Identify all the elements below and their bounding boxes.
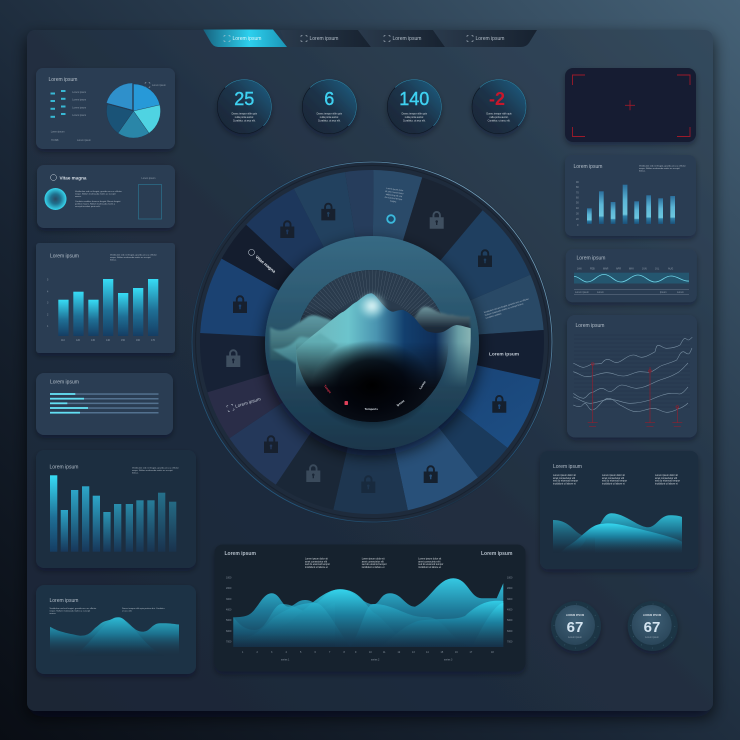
description: finibus. — [110, 260, 117, 262]
title: Lorem ipsum — [50, 380, 79, 386]
title: Lorem ipsum — [50, 598, 78, 604]
axis: 70 — [576, 192, 579, 194]
mountains — [270, 292, 471, 430]
footer labels — [51, 130, 91, 142]
radial wheel — [191, 161, 553, 523]
title left: Lorem ipsum — [224, 551, 256, 557]
axes: 1 — [242, 651, 244, 654]
axis — [47, 278, 156, 342]
axes: 1000 — [507, 576, 513, 580]
text blocks: Lorem ipsum dolor sit — [305, 558, 328, 560]
gauge right — [628, 601, 678, 651]
axes: 2000 — [226, 587, 232, 590]
text blocks: sed do eiusmod tempor — [553, 480, 578, 483]
footer labels: Lorem ipsum — [77, 139, 91, 142]
text blocks: Lorem ipsum dolor sit — [655, 474, 678, 477]
text blocks: incididunt ut labore et — [362, 566, 385, 569]
caption: nulla porta auctor. — [235, 116, 254, 119]
month labels: JAN — [577, 268, 582, 270]
description: finibus. — [639, 170, 646, 172]
stat: 25 — [217, 80, 271, 134]
dial bowl — [296, 270, 448, 422]
segment label: lorem ipsum left: Lorem ipsum — [234, 396, 262, 409]
descriptions: ut arcu elit. — [122, 610, 133, 612]
month labels: FEB — [590, 268, 595, 270]
wave — [574, 274, 689, 282]
axis: 170 — [151, 339, 156, 342]
footer: Lorem ipsum — [575, 291, 589, 294]
value: 25 — [234, 89, 254, 109]
progress — [50, 393, 88, 414]
axis: 30 — [576, 212, 579, 216]
description — [110, 254, 157, 262]
main massif — [296, 293, 471, 390]
description: Vestibulum sed est feugiat, gravida arcu ac efficitur — [132, 466, 179, 470]
text blocks: Lorem ipsum dolor sit — [418, 558, 441, 560]
areas — [233, 578, 503, 647]
text blocks: sed do eiusmod tempor — [602, 480, 627, 483]
axes: series 1 — [281, 658, 290, 662]
active tab: Lorem ipsum — [232, 36, 261, 42]
panel: wave — [566, 249, 697, 302]
description — [639, 164, 686, 172]
text blocks — [553, 474, 680, 485]
axis: 80 — [576, 186, 579, 189]
text block: Curabitur sodales rhoncus feugiat. Mauris feugiat — [75, 200, 121, 203]
caption: Curabitur, ut arcu elit. — [403, 120, 426, 122]
axes: 2 — [256, 651, 258, 654]
text blocks: Lorem ipsum dolor sit — [553, 474, 576, 477]
caption: Donec tempor nibh quis — [232, 112, 258, 116]
caption: Curabitur, ut arcu elit. — [233, 120, 256, 122]
axis: 110 — [61, 339, 65, 342]
description: neque. Nullam malesuada mattis ac suscipit — [639, 167, 680, 170]
areas — [553, 513, 682, 553]
text block: finibus. — [75, 196, 82, 198]
central hub — [265, 236, 479, 450]
footer labels: Lorem ipsum — [51, 130, 65, 133]
gauge left: LOREM IPSUM — [566, 613, 584, 617]
text blocks: Lorem ipsum dolor sit — [362, 558, 385, 560]
axes: 3000 — [507, 598, 513, 601]
axes: 6000 — [507, 630, 513, 633]
title: Lorem ipsum — [50, 464, 78, 470]
title: Lorem ipsum — [576, 323, 604, 329]
axes: 2000 — [507, 587, 513, 590]
caption — [486, 112, 512, 122]
caption — [232, 112, 258, 122]
value: -2 — [489, 89, 505, 109]
axes: 4 — [286, 651, 288, 654]
tabs — [203, 30, 537, 47]
axes: 9 — [355, 651, 357, 654]
pie label: Lorem ipsum — [152, 84, 166, 87]
description: finibus. — [132, 472, 139, 474]
descriptions: finibus. — [50, 613, 57, 615]
caption: nulla porta auctor. — [489, 116, 509, 119]
back ridge left — [270, 315, 335, 360]
dial labels: Tempo — [323, 384, 332, 394]
axis: 50 — [576, 202, 579, 204]
axis: 0 — [577, 224, 579, 227]
description: Vestibulum sed est feugiat, gravida arcu ac efficitur — [639, 164, 686, 168]
gauge right: Lorem ipsum — [645, 636, 659, 639]
axes: 3000 — [226, 598, 232, 601]
axis — [576, 181, 579, 227]
text blocks: sed do eiusmod tempor — [418, 563, 443, 566]
axes: 10 — [369, 651, 372, 654]
axes — [226, 576, 513, 662]
segment text: right — [484, 297, 531, 320]
gauge ticks — [631, 604, 675, 648]
text blocks: amet consectetur elit — [362, 560, 384, 563]
grid — [574, 335, 690, 407]
axis: 150 — [121, 339, 126, 342]
axes: 5000 — [507, 619, 513, 622]
gauge left: Lorem ipsum — [568, 636, 582, 639]
panel: line chart — [567, 315, 697, 438]
panel: vitae magna — [37, 165, 175, 228]
outer rings — [191, 161, 553, 523]
caption: nulla porta auctor. — [320, 116, 339, 119]
axis: 2 — [47, 314, 49, 316]
gauge ticks — [554, 604, 598, 648]
caption: Curabitur, ut arcu elit. — [488, 120, 511, 122]
caption: Donec tempor nibh quis — [486, 112, 512, 116]
axes: 12 — [398, 651, 401, 654]
dial labels: Lorem — [418, 380, 427, 390]
title: Lorem ipsum — [50, 254, 79, 260]
bars — [58, 279, 158, 336]
axis: 160 — [136, 339, 141, 342]
axes: 18 — [491, 651, 494, 654]
tab 4 — [433, 30, 537, 47]
segment text: right: Curabitur sodales — [485, 312, 502, 320]
axes: 4000 — [507, 608, 513, 612]
axis: 5 — [47, 278, 49, 282]
panel: pie chart — [36, 68, 175, 149]
segment marker ring — [387, 215, 395, 223]
text block: neque. Nullam malesuada mattis ac suscipit — [75, 192, 116, 196]
axes: 4000 — [226, 608, 232, 612]
footer: Lorem — [677, 291, 684, 294]
segment text: top: do eiusmod tempor — [384, 196, 403, 201]
axes: 5000 — [226, 619, 232, 622]
title: Lorem ipsum — [574, 164, 602, 170]
bars — [587, 185, 675, 224]
glowing orb — [44, 188, 66, 210]
legend: Lorem ipsum — [72, 106, 86, 109]
wheel segments — [200, 170, 544, 514]
text blocks: amet consectetur elit — [418, 560, 441, 563]
box label: Lorem ipsum — [142, 177, 155, 180]
gauge left — [551, 601, 601, 651]
axes: 13 — [412, 651, 415, 654]
caption: Donec tempor nibh quis — [402, 112, 428, 116]
axis: 3 — [47, 302, 49, 304]
back ridge right — [412, 307, 470, 336]
stat: -2 — [472, 80, 526, 134]
text blocks: Lorem ipsum dolor sit — [602, 474, 625, 477]
text blocks: sed do eiusmod tempor — [305, 563, 330, 566]
segment label: lorem ipsum left — [227, 396, 262, 412]
segment text: right: Vestibulum sed est feugiat, gravida arcu ac efficitur — [484, 297, 530, 314]
panel: bar chart 2 — [36, 450, 196, 568]
panel: bar chart right — [565, 155, 696, 236]
title: Lorem ipsum — [553, 464, 582, 470]
caption: nulla porta auctor. — [405, 116, 424, 119]
axis: 90 — [576, 181, 579, 184]
segment text: top: sit amet consectetur — [385, 190, 404, 195]
caption: Donec tempor nibh quis — [317, 112, 343, 116]
segment text: top — [384, 187, 404, 204]
axes: 7000 — [507, 640, 513, 644]
axes: 7 — [329, 651, 331, 654]
legend: Lorem ipsum — [72, 91, 86, 94]
descriptions: Donec tempor nibh quis pretium dui. Curabitur — [122, 607, 165, 610]
gauge right: LOREM IPSUM — [643, 613, 661, 617]
bars — [50, 475, 176, 552]
axes: 16 — [455, 651, 458, 654]
title right: Lorem ipsum — [481, 551, 513, 557]
front ridge left — [272, 334, 337, 364]
legend — [50, 90, 86, 118]
axis: 1 — [47, 325, 49, 328]
text blocks: incididunt ut labore et — [305, 566, 328, 569]
axis: 4 — [47, 290, 49, 294]
text blocks: amet consectetur elit — [553, 477, 575, 480]
stat: 6 — [302, 80, 356, 134]
text block: porttitor mauris. Nullam malesuada mattis a — [75, 202, 116, 206]
tab 3: Lorem ipsum — [392, 36, 421, 42]
axis: 120 — [76, 339, 81, 342]
axes: 15 — [440, 651, 444, 654]
axis: 60 — [576, 196, 579, 200]
central darkness — [318, 341, 422, 427]
tab 2: Lorem ipsum — [310, 36, 338, 42]
panel: area chart left — [36, 585, 196, 674]
month labels — [577, 268, 673, 270]
footer labels: 70 098 — [51, 139, 59, 142]
panel: area chart right — [540, 451, 698, 569]
text block — [75, 190, 122, 208]
footer: Ipsum — [660, 291, 667, 294]
segment label: vitae magna: Vitae magna — [254, 254, 277, 274]
tracks — [50, 393, 158, 414]
value: 140 — [399, 89, 429, 109]
month labels: AUG — [668, 268, 673, 270]
snow highlight — [357, 292, 387, 320]
lock icons — [226, 203, 506, 493]
legend: Lorem ipsum — [72, 99, 86, 102]
dial labels: Temporis — [365, 407, 378, 411]
month labels: MAR — [603, 268, 609, 270]
text blocks: incididunt ut labore et — [602, 482, 625, 485]
axes: 17 — [470, 651, 473, 654]
axis: 40 — [576, 207, 579, 210]
description: neque. Nullam malesuada mattis ac suscipit — [110, 256, 151, 259]
text block: suscipit tincidunt porta velit. — [75, 205, 101, 208]
band — [574, 273, 689, 284]
title: Lorem ipsum — [576, 256, 605, 262]
text blocks: sed do eiusmod tempor — [362, 563, 387, 566]
axis: 20 — [576, 218, 579, 221]
axes: 1000 — [226, 576, 232, 580]
segment text: top: adipiscing elit sed — [386, 193, 403, 198]
dial labels — [323, 380, 427, 411]
mountain body with fade — [270, 293, 471, 390]
month labels: APR — [616, 268, 621, 270]
stat: 140 — [387, 80, 441, 134]
description — [132, 466, 179, 474]
radial fan — [298, 270, 446, 422]
panel: bottom wide area chart — [214, 544, 526, 672]
corner brackets — [572, 75, 690, 136]
description: neque. Nullam malesuada mattis ac suscipit — [132, 469, 173, 472]
value: 67 — [567, 619, 583, 636]
heading: Vitae magna — [60, 176, 87, 180]
axes: 11 — [383, 651, 386, 654]
descriptions — [50, 607, 165, 615]
segment text: right: Nullam malesuada mattis ac suscipit finibus — [484, 302, 524, 317]
segment label: lorem ipsum right: Lorem ipsum — [489, 352, 519, 358]
axis: 130 — [91, 339, 96, 342]
description: Vestibulum sed est feugiat, gravida arcu ac efficitur — [110, 254, 157, 256]
lines — [573, 337, 692, 412]
caption — [317, 112, 343, 122]
tab 4: Lorem ipsum — [476, 36, 504, 42]
active tab — [203, 30, 287, 47]
text blocks: amet consectetur elit — [655, 477, 677, 480]
axes: 14 — [426, 651, 429, 654]
text blocks: amet consectetur elit — [305, 560, 327, 563]
axes: 6 — [314, 651, 316, 654]
month labels: JUN — [642, 268, 647, 270]
footer: Lorem — [597, 291, 604, 294]
axis: 140 — [106, 339, 111, 342]
month labels: JUL — [655, 268, 660, 270]
text blocks: incididunt ut labore et — [553, 482, 576, 485]
panel title: Lorem ipsum — [48, 77, 77, 83]
tab 2 — [280, 30, 371, 47]
text blocks: amet consectetur elit — [602, 477, 624, 480]
segment text: top: magna — [390, 200, 397, 203]
text blocks: incididunt ut labore et — [655, 482, 678, 485]
axes: 8 — [344, 651, 346, 654]
value: 67 — [644, 619, 660, 636]
segment label: vitae magna — [247, 248, 277, 275]
text blocks — [305, 558, 443, 569]
descriptions: Vestibulum sed est feugiat, gravida arcu ac efficitur — [50, 607, 97, 610]
axes: 6000 — [226, 630, 232, 633]
tab 3 — [358, 30, 445, 47]
text blocks: incididunt ut labore et — [418, 566, 441, 569]
axes: series 3 — [444, 658, 453, 662]
panel: progress lines — [36, 373, 173, 435]
axes: 3 — [271, 651, 273, 654]
month labels: MAY — [629, 268, 634, 270]
icon — [50, 174, 56, 180]
area — [50, 617, 179, 656]
caption — [402, 112, 428, 122]
axes: series 2 — [371, 658, 380, 662]
axes: 5 — [300, 651, 302, 654]
segment text: top: Lorem ipsum dolor — [386, 187, 404, 192]
outlined box — [138, 184, 162, 219]
value: 6 — [324, 89, 334, 109]
axes: 7000 — [226, 640, 232, 644]
footer — [574, 290, 689, 294]
legend: Lorem ipsum — [72, 114, 86, 117]
text block: Vestibulum sed est feugiat, gravida arcu ac efficitur — [75, 190, 122, 193]
descriptions: neque. Nullam malesuada mattis ac suscipit — [50, 610, 90, 612]
panel: target view — [565, 68, 696, 142]
text blocks: sed do eiusmod tempor — [655, 480, 680, 483]
pie — [106, 83, 160, 138]
panel: bar chart 1 — [36, 243, 175, 353]
caption: Curabitur, ut arcu elit. — [318, 120, 341, 122]
red markers — [588, 363, 682, 427]
dial labels: Ipsum — [396, 399, 406, 407]
